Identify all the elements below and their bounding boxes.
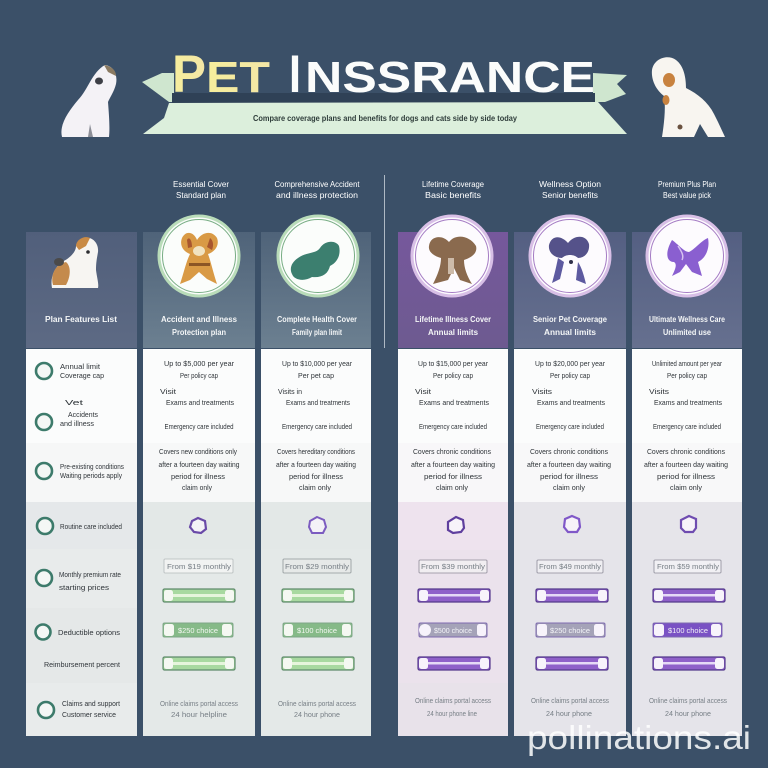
plan 2 body text: claim only (299, 483, 331, 492)
divider (384, 175, 386, 348)
plan 1 body text: after a fourteen day waiting (158, 460, 240, 469)
title: NSSRANCE (305, 53, 595, 102)
plan 1 body text: period for illness (171, 472, 225, 481)
plan 1 body text: Exams and treatments (166, 398, 234, 407)
plan 3 body text: claim only (436, 483, 468, 492)
column labels: Standard plan (176, 191, 226, 200)
plan 1 body text: Emergency care included (164, 422, 234, 431)
panel: plan 4 (514, 216, 626, 736)
plan 2 body text: Exams and treatments (286, 398, 350, 407)
footer text (278, 699, 356, 719)
feature labels: Pre-existing conditions (60, 462, 124, 471)
plan 5 body text: Per policy cap (667, 371, 707, 380)
plan 5 body text: claim only (670, 483, 702, 492)
plan 3 body text: Covers chronic conditions (413, 447, 491, 456)
plan 5 body text: Visits (649, 387, 669, 396)
price label: From $29 monthly (285, 562, 349, 571)
feature labels: Annual limit (60, 362, 101, 371)
column labels: Wellness Option (539, 180, 601, 189)
plan 2 header text: Family plan limit (292, 328, 342, 337)
plan 2 body text: after a fourteen day waiting (276, 460, 356, 469)
plan 3 header text (415, 315, 491, 337)
feature labels: Deductible options (58, 628, 120, 637)
plan 2 body text: Visits in (278, 387, 302, 396)
feature labels: Routine care included (60, 522, 122, 531)
footer text: 24 hour phone line (427, 709, 477, 718)
plan 1 body text: Covers new conditions only (159, 447, 237, 456)
column labels: Lifetime Coverage (422, 180, 485, 189)
plan 4 badge (530, 216, 610, 296)
price label: From $39 monthly (421, 562, 485, 571)
plan 5 header text: Ultimate Wellness Care (649, 315, 725, 324)
column labels: Premium Plus Plan (658, 180, 716, 189)
feature labels: Coverage cap (60, 371, 104, 380)
price label (419, 560, 487, 573)
green bar (282, 589, 354, 602)
plan 5 body text: period for illness (657, 472, 715, 481)
plan 2 body text: Per pet cap (298, 371, 334, 380)
icon: badge (681, 516, 696, 532)
footer text (649, 696, 727, 718)
plan 3 body text: Up to $15,000 per year (418, 359, 488, 368)
grey labelled bar: $500 choice (434, 628, 472, 635)
column labels: Senior benefits (542, 191, 598, 200)
title: P (172, 45, 206, 104)
column header: features (26, 232, 137, 348)
title: I (289, 45, 301, 104)
price label: From $59 monthly (657, 562, 719, 571)
price label: From $19 monthly (167, 562, 231, 571)
price label (654, 560, 721, 573)
feature labels: Vet (65, 398, 85, 407)
footer text: Online claims portal access (531, 696, 609, 705)
icon rings (36, 363, 54, 718)
column labels: Comprehensive Accident (274, 180, 360, 189)
plan 3 badge (412, 216, 492, 296)
grey labelled bar: $250 choice (550, 628, 590, 635)
purple bar (536, 589, 608, 602)
title: ET (206, 53, 270, 102)
purple bar (418, 657, 490, 670)
plan 4 header text: Senior Pet Coverage (533, 315, 608, 324)
footer text: Online claims portal access (649, 696, 727, 705)
plan 4 body text (527, 359, 611, 492)
feature labels (44, 362, 124, 719)
green labelled bar: $100 choice (297, 628, 337, 635)
plan 1 badge (159, 216, 239, 296)
plan 1 body text: Up to $5,000 per year (164, 359, 234, 368)
plan 3 body text: Visit (415, 387, 432, 396)
purple bar (536, 657, 608, 670)
grey labelled bar (419, 623, 487, 637)
icon: badge (309, 517, 326, 533)
footer text: 24 hour phone (546, 709, 592, 718)
plan 2 body text: Up to $10,000 per year (282, 359, 352, 368)
footer text (531, 696, 609, 718)
plan 5 body text: Emergency care included (653, 422, 721, 431)
plan 5 body text: Exams and treatments (654, 398, 722, 407)
footer text (415, 696, 491, 718)
grey labelled bar (536, 623, 605, 637)
plan 3 body text: Emergency care included (419, 422, 487, 431)
plan 4 body text: Exams and treatments (537, 398, 605, 407)
green labelled bar (283, 623, 352, 637)
icon: calico dog (51, 237, 98, 288)
plan 5 body text: Unlimited amount per year (652, 359, 722, 368)
plan 2 body text: period for illness (289, 472, 343, 481)
purple bar (653, 589, 725, 602)
plan 4 body text: Up to $20,000 per year (535, 359, 605, 368)
price label (537, 560, 603, 573)
price label: From $49 monthly (539, 562, 601, 571)
plan 4 body text: Per policy cap (550, 371, 590, 380)
feature labels: and illness (60, 419, 94, 428)
plan 3 body text (411, 359, 495, 492)
plan 4 body text: claim only (553, 483, 585, 492)
plan 4 body text: Visits (532, 387, 552, 396)
panel: features column (26, 232, 137, 736)
plan 1 header text: Protection plan (172, 328, 226, 337)
price label (283, 559, 351, 573)
icon: badge (190, 518, 206, 533)
panel: features column: Plan Features List (45, 315, 117, 324)
footer text: 24 hour phone (294, 710, 340, 719)
feature labels: starting prices (59, 583, 109, 592)
purple labelled bar: $100 choice (668, 628, 708, 635)
icon: left dog (61, 65, 116, 137)
price label (164, 559, 233, 573)
feature labels: Waiting periods apply (60, 471, 122, 480)
footer text: 24 hour helpline (171, 710, 227, 719)
plan 2 header text: Complete Health Cover (277, 315, 357, 324)
panel: plan 2 (261, 216, 371, 736)
purple labelled bar (653, 623, 722, 637)
watermark: pollinations.ai (527, 719, 751, 756)
plan 5 body text: after a fourteen day waiting (644, 460, 728, 469)
plan 3 header text: Lifetime Illness Cover (415, 315, 491, 324)
plan 1 body text (158, 359, 240, 492)
green bar (163, 589, 235, 602)
plan 1 body text: claim only (182, 483, 212, 492)
icon: right dog (652, 57, 725, 137)
plan 1 body text: Per policy cap (180, 371, 218, 380)
panel: plan 3 (398, 216, 508, 736)
feature labels: Accidents (68, 410, 98, 419)
footer text: Online claims portal access (278, 699, 356, 708)
plan 5 body text (644, 359, 728, 492)
feature labels: Claims and support (62, 699, 121, 708)
plan 5 header text (649, 315, 725, 337)
plan 3 body text: Exams and treatments (419, 398, 489, 407)
purple bar (418, 589, 490, 602)
plan 3 body text: period for illness (424, 472, 482, 481)
plan 3 header text: Annual limits (428, 328, 479, 337)
plan 2 body text: Emergency care included (282, 422, 352, 431)
footer text: 24 hour phone (665, 709, 711, 718)
column labels (173, 180, 716, 200)
plan 2 header text (277, 315, 357, 337)
plan 3 body text: after a fourteen day waiting (411, 460, 495, 469)
footer text (160, 699, 238, 719)
subtitle: Compare coverage plans and benefits for dogs and cats side by side today (253, 114, 518, 123)
column labels: Essential Cover (173, 180, 229, 189)
green bar (163, 657, 235, 670)
plan 2 body text: Covers hereditary conditions (277, 447, 355, 456)
feature labels: Reimbursement percent (44, 660, 121, 669)
footer text: Online claims portal access (160, 699, 238, 708)
green bar (282, 657, 354, 670)
plan 1 header text (161, 315, 238, 337)
icon: badge (564, 516, 580, 532)
column labels: Basic benefits (425, 191, 481, 200)
plan 1 body text: Visit (160, 387, 177, 396)
feature labels: Customer service (62, 710, 116, 719)
column labels: and illness protection (276, 191, 358, 200)
feature labels: Monthly premium rate (59, 570, 121, 579)
footer text: Online claims portal access (415, 696, 491, 705)
plan 5 header text: Unlimited use (663, 328, 712, 337)
plan 4 header text (533, 315, 608, 337)
purple bar (653, 657, 725, 670)
plan 3 body text: Per policy cap (433, 371, 473, 380)
panel: plan 5 (632, 216, 742, 736)
green labelled bar: $250 choice (178, 628, 218, 635)
panel: plan 1 (143, 216, 255, 736)
plan 4 body text: Emergency care included (536, 422, 604, 431)
plan 2 body text (276, 359, 356, 492)
green labelled bar (163, 623, 233, 637)
column labels: Best value pick (663, 191, 712, 200)
icon: badge (448, 517, 464, 533)
plan 2 badge (278, 216, 358, 296)
plan 5 body text: Covers chronic conditions (647, 447, 725, 456)
title ribbon (142, 73, 627, 134)
plan 5 badge (647, 216, 727, 296)
plan 4 body text: after a fourteen day waiting (527, 460, 611, 469)
plan 1 header text: Accident and Illness (161, 315, 238, 324)
plan 4 header text: Annual limits (544, 328, 597, 337)
title (172, 45, 595, 104)
plan 4 body text: Covers chronic conditions (530, 447, 608, 456)
plan 4 body text: period for illness (540, 472, 598, 481)
